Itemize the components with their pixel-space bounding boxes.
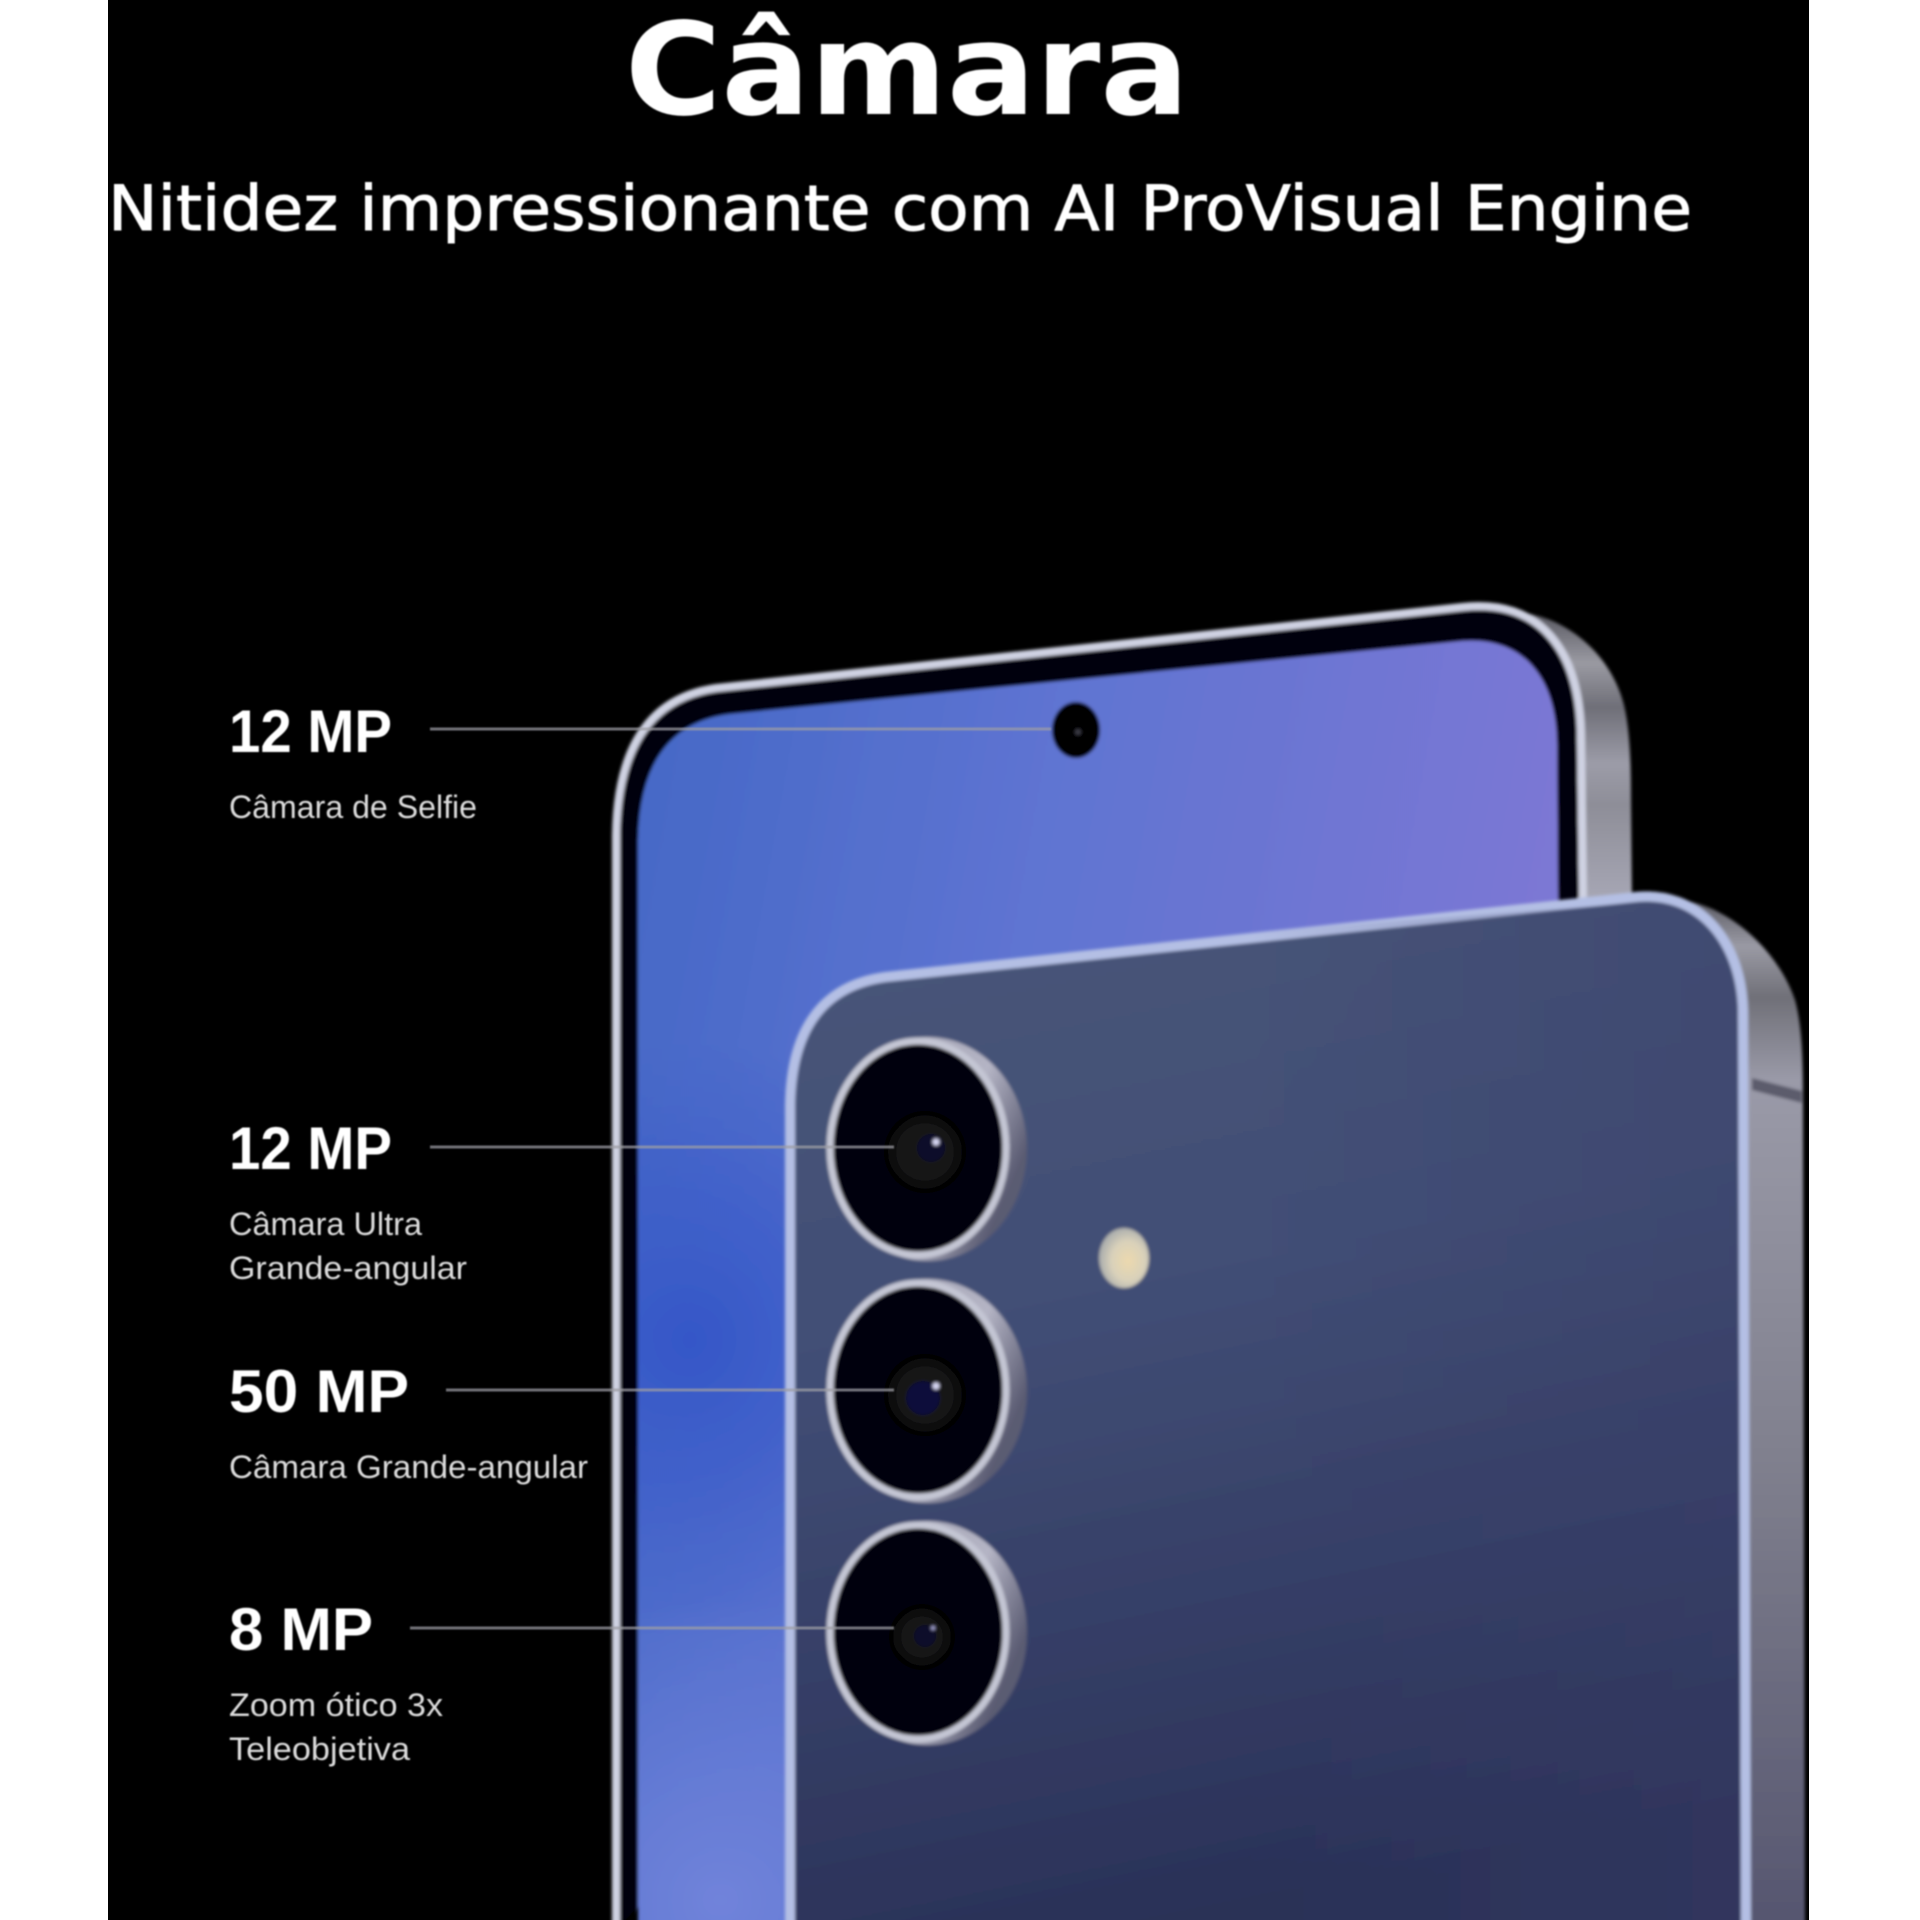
icon: lower camera lens [829, 1521, 1027, 1745]
phone: front view with screen [616, 606, 1632, 1920]
callout: ultra wide camera [229, 1115, 467, 1286]
callout: ultra wide camera: Grande-angular [229, 1250, 467, 1286]
callout: ultra wide camera: Câmara Ultra [229, 1206, 422, 1242]
callout: telephoto camera [229, 1596, 443, 1767]
phone: back view with cameras [790, 896, 1805, 1920]
decorative side band [1752, 1078, 1802, 1103]
callout: telephoto camera: Teleobjetiva [229, 1731, 410, 1767]
callout: wide camera: Câmara Grande-angular [229, 1449, 588, 1485]
icon: middle camera lens [829, 1279, 1027, 1503]
icon: flash [1099, 1228, 1149, 1288]
back phone metal side frame [1680, 900, 1805, 1920]
callout: selfie camera [229, 698, 477, 825]
icon: upper camera lens [829, 1037, 1027, 1261]
title: Câmara [625, 0, 1189, 145]
back phone glass and rim [790, 896, 1746, 1920]
back panel shading [1200, 902, 1741, 1920]
callout lines [410, 729, 1051, 1628]
icon: selfie camera hole [1052, 702, 1100, 758]
callout: telephoto camera: Zoom ótico 3x [229, 1687, 443, 1723]
callout: selfie camera: Câmara de Selfie [229, 789, 477, 825]
front phone metal side frame [1510, 612, 1632, 905]
front phone glass and rim [616, 606, 1583, 1920]
callout: wide camera: 50 MP [229, 1358, 409, 1425]
callout: ultra wide camera: 12 MP [229, 1115, 392, 1182]
callout: selfie camera: 12 MP [229, 698, 392, 765]
front phone screen [638, 641, 1558, 1920]
callout: wide camera [229, 1358, 588, 1485]
callout: telephoto camera: 8 MP [229, 1596, 373, 1663]
subtitle: Nitidez impressionante com AI ProVisual Engine [108, 172, 1692, 245]
